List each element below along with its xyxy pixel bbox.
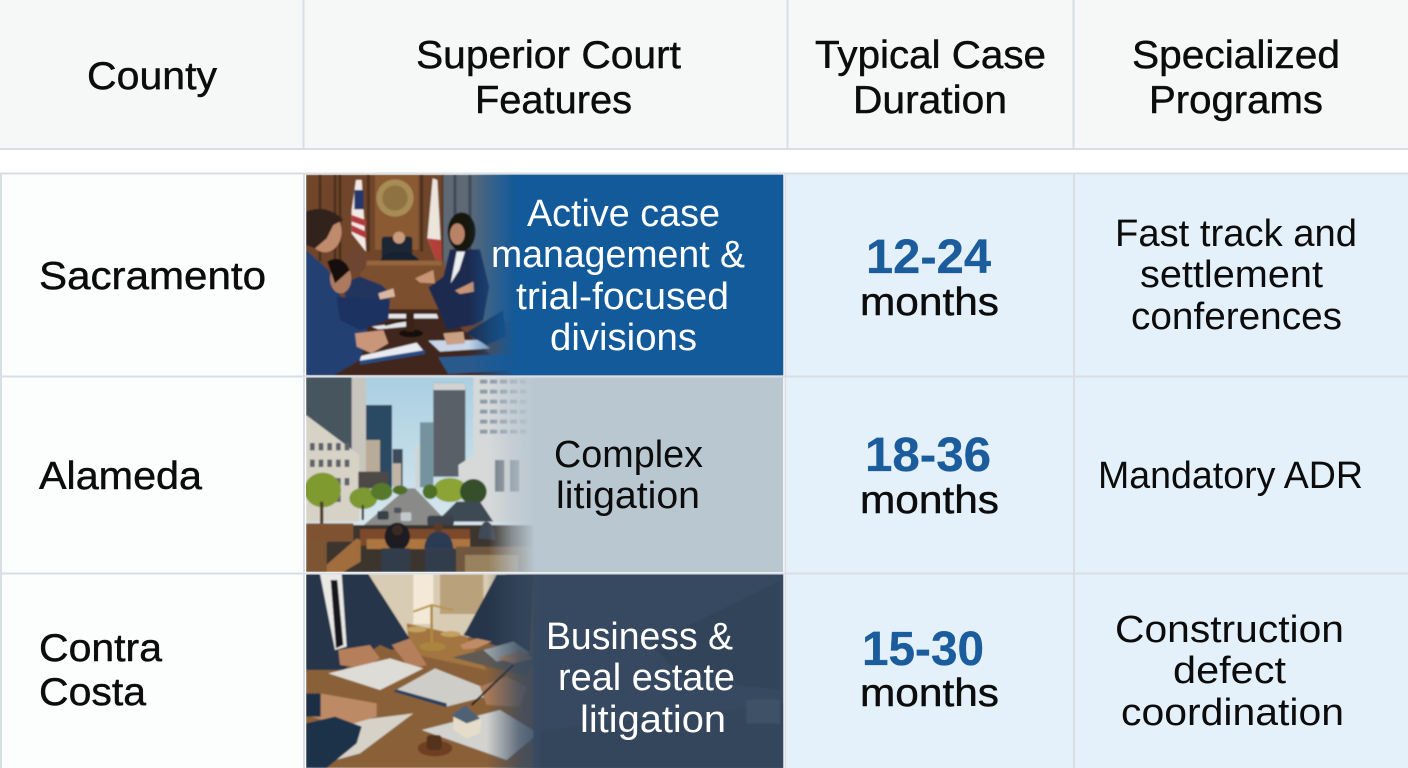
program cell: Construction defect coordination: Construction xyxy=(1115,609,1344,651)
feature text: Active case management: management & xyxy=(491,234,745,276)
program cell: Mandatory ADR: Mandatory ADR xyxy=(1098,455,1363,497)
feature text: Active case management xyxy=(491,193,745,359)
feature text: Business and real estate litigation xyxy=(546,616,735,741)
program cell: Fast track: settlement xyxy=(1140,254,1323,296)
duration cell: 12-24 months xyxy=(787,173,1074,376)
duration cell: 15-30 months: months xyxy=(860,672,999,715)
program cell: Fast track: conferences xyxy=(1131,296,1342,338)
feature text: Complex litigation xyxy=(554,434,703,517)
duration cell: 18-36 months xyxy=(787,377,1074,573)
feature text: Business and real estate litigation: litigation xyxy=(580,699,726,741)
county cell: Sacramento xyxy=(0,173,304,376)
heading: Superior Court Features: Features xyxy=(475,79,632,122)
feature cell: courtroom photo with blue panel xyxy=(306,175,783,375)
county cell: Contra Costa: Contra xyxy=(39,627,162,670)
row: Alameda xyxy=(0,377,1408,573)
duration cell: 15-30 months xyxy=(787,574,1074,768)
heading: Typical Case Duration: Duration xyxy=(853,79,1007,122)
feature text: Business and real estate litigation: real estate xyxy=(558,657,735,699)
feature cell: city street photo with grey panel xyxy=(304,377,783,572)
program cell: Construction defect coordination: defect xyxy=(1173,650,1286,692)
duration cell: 18-36 months: months xyxy=(860,479,999,522)
feature cell: business meeting photo with dark panel xyxy=(306,574,783,768)
program cell: Fast track: Fast track and xyxy=(1115,213,1357,255)
program cell: Construction defect coordination xyxy=(1074,574,1408,768)
program cell: Mandatory ADR xyxy=(1074,377,1408,573)
duration cell: 12-24 months: 12-24 xyxy=(866,231,991,284)
county cell: Alameda xyxy=(0,377,304,573)
heading: Superior Court Features: Superior Court xyxy=(416,34,681,77)
heading: Typical Case Duration xyxy=(815,34,1046,122)
program cell: Fast track xyxy=(1074,173,1408,376)
feature text: Active case management: trial-focused xyxy=(516,276,729,318)
feature text: Active case management: divisions xyxy=(550,317,697,359)
heading: Specialized Programs: Programs xyxy=(1149,79,1323,122)
feature text: Active case management: Active case xyxy=(527,193,720,235)
table header row xyxy=(0,0,1408,149)
duration cell: 12-24 months: months xyxy=(860,281,999,324)
feature text: Business and real estate litigation: Business & xyxy=(546,616,733,658)
heading: Superior Court Features xyxy=(416,34,681,122)
program cell: Construction defect coordination: coordination xyxy=(1121,692,1344,734)
heading: Specialized Programs xyxy=(1132,34,1340,122)
heading: County: County xyxy=(87,55,218,98)
feature text: Complex litigation: litigation xyxy=(556,475,700,517)
county cell: Sacramento: Sacramento xyxy=(39,255,266,298)
row: Contra Costa xyxy=(0,574,1408,768)
heading: Typical Case Duration: Typical Case xyxy=(815,34,1046,77)
duration cell: 15-30 months: 15-30 xyxy=(862,623,984,676)
county cell: Alameda: Alameda xyxy=(39,455,202,498)
duration cell: 18-36 months: 18-36 xyxy=(865,429,991,482)
heading: Specialized Programs: Specialized xyxy=(1132,34,1340,77)
county cell: Contra Costa: Costa xyxy=(39,671,146,714)
row: Sacramento xyxy=(0,173,1408,376)
county cell: Contra Costa xyxy=(0,574,304,768)
feature text: Complex litigation: Complex xyxy=(554,434,703,476)
